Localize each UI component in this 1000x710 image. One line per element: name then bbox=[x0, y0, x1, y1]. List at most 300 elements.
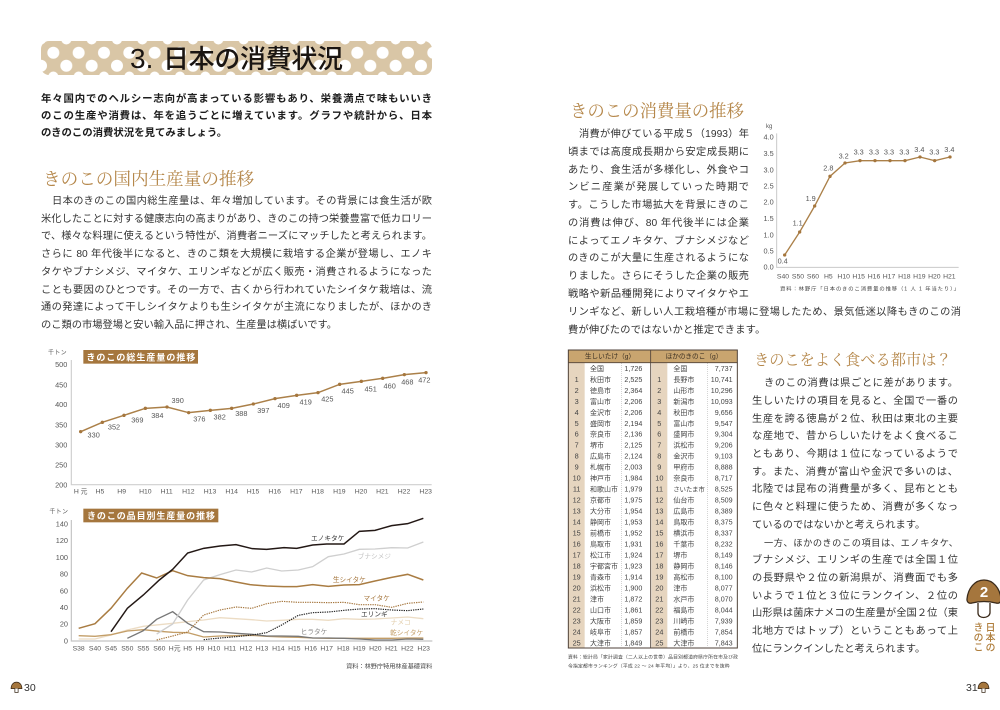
data values: 382 bbox=[214, 412, 226, 421]
table rows: 8,509 bbox=[715, 497, 733, 505]
axes bbox=[71, 520, 432, 641]
x axis labels: H元 bbox=[169, 645, 181, 653]
x axis labels: H18 bbox=[898, 273, 911, 280]
body text: consumption: のきのこが大量に生産されるようにな bbox=[568, 253, 749, 264]
body text: cities: な産地で、昔からしいたけをよく食べるこ bbox=[752, 431, 958, 442]
chart heading bbox=[83, 509, 218, 522]
y axis labels: 0 bbox=[64, 636, 68, 645]
chart heading: きのこの品目別生産量の推移 bbox=[87, 510, 215, 521]
table rows: 1,857 bbox=[624, 628, 642, 636]
table rows: 盛岡市 bbox=[673, 430, 694, 439]
data values: 419 bbox=[300, 398, 312, 407]
data values: 384 bbox=[151, 411, 163, 420]
table rows: 13 bbox=[655, 507, 663, 516]
intro text: のきのこの消費状況を見てみましょう。 bbox=[41, 128, 227, 138]
table rows: 奈良市 bbox=[590, 430, 611, 439]
x axis labels: S50 bbox=[792, 273, 804, 280]
x axis labels: S40 bbox=[89, 646, 101, 653]
table rows: 高松市 bbox=[673, 572, 694, 581]
table rows: 8,070 bbox=[715, 595, 733, 603]
data values: 2.8 bbox=[823, 163, 833, 172]
data values: 409 bbox=[278, 401, 290, 410]
intro text: のこの生産や消費は、年を追うごとに増えています。グラフや統計から、日本 bbox=[41, 110, 432, 122]
title band bbox=[41, 41, 432, 75]
table rows: 8,100 bbox=[715, 573, 733, 581]
data values: 3.3 bbox=[899, 147, 909, 156]
x axis labels: S60 bbox=[153, 646, 166, 653]
body text: consumption bbox=[568, 128, 961, 336]
x axis labels: H16 bbox=[304, 646, 317, 653]
data values: 3.3 bbox=[929, 147, 939, 156]
table rows: 2 bbox=[657, 386, 661, 395]
table rows: 2,364 bbox=[624, 387, 642, 395]
y axis labels bbox=[49, 507, 68, 645]
icon: chapter mushroom badge bbox=[966, 579, 1000, 618]
data values: 3.4 bbox=[914, 145, 924, 154]
x axis labels: H11 bbox=[224, 646, 236, 653]
x axis labels: H15 bbox=[852, 273, 865, 280]
x axis labels: H12 bbox=[182, 488, 195, 495]
body text: consumption: 消費が伸びている平成５（1993）年 bbox=[579, 128, 749, 140]
x axis labels: H5 bbox=[183, 646, 192, 653]
y axis labels: kg bbox=[766, 124, 772, 130]
x axis labels: H11 bbox=[161, 488, 173, 495]
table rows bbox=[573, 364, 733, 647]
table rows: 19 bbox=[573, 572, 581, 581]
y axis labels: 千トン bbox=[49, 507, 68, 515]
line chart: production by variety bbox=[49, 507, 432, 670]
table rows: 8,044 bbox=[715, 606, 733, 614]
x axis labels: H12 bbox=[240, 646, 252, 653]
table rows: 金沢市 bbox=[673, 452, 694, 461]
data values: 352 bbox=[108, 422, 120, 431]
table rows: 12 bbox=[655, 496, 663, 505]
body text: consumption: あたり、食生活が多様化し、外食やコ bbox=[568, 164, 749, 176]
table rows: 川崎市 bbox=[673, 616, 694, 625]
body text: consumption: ンビニ産業が発展していった時期で bbox=[568, 182, 749, 193]
table rows: 18 bbox=[655, 561, 663, 570]
table rows: 新潟市 bbox=[673, 397, 694, 406]
table rows: 1,849 bbox=[624, 639, 642, 647]
y axis labels: 100 bbox=[56, 553, 68, 562]
data values: 3.3 bbox=[884, 147, 894, 156]
body text: cities: いようで１位と３位にランクイン、２位の bbox=[752, 590, 958, 602]
ranking table bbox=[568, 350, 738, 669]
table rows: 14 bbox=[573, 518, 581, 527]
axes bbox=[777, 133, 959, 267]
table rows: 25 bbox=[573, 638, 581, 647]
table rows: 大分市 bbox=[590, 507, 611, 516]
table rows: 千葉市 bbox=[673, 539, 694, 548]
intro text: 年々国内でのヘルシー志向が高まっている影響もあり、栄養満点で味もいいき bbox=[41, 94, 432, 104]
data line bbox=[79, 371, 428, 433]
table rows: 8 bbox=[657, 452, 661, 461]
data values: 388 bbox=[235, 409, 247, 418]
y axis labels: 4.0 bbox=[763, 133, 774, 142]
table rows: 16 bbox=[573, 539, 581, 548]
body text: consumption: 戦略や新品種開発によりマイタケやエ bbox=[568, 288, 749, 300]
x axis labels: H14 bbox=[225, 488, 238, 495]
x axis labels: H17 bbox=[320, 646, 333, 653]
x axis labels: H13 bbox=[204, 488, 216, 495]
table rows: 1,726 bbox=[624, 365, 642, 373]
body text: cities: す。また、消費が富山や金沢で多いのは、 bbox=[752, 466, 958, 478]
y axis labels bbox=[763, 124, 774, 272]
table rows: 1,923 bbox=[624, 562, 642, 570]
y axis labels: 1.0 bbox=[763, 230, 774, 239]
x axis labels bbox=[777, 273, 956, 280]
y axis labels: 2.0 bbox=[763, 198, 774, 207]
table rows: さいたま市 bbox=[673, 485, 705, 494]
table rows: 宇都宮市 bbox=[590, 561, 618, 570]
body text: cities: ているのではないかと考えられます。 bbox=[752, 520, 925, 530]
x axis labels: H5 bbox=[96, 488, 105, 495]
body text: cities: ともあり、今期は１位になっているようで bbox=[752, 449, 958, 460]
series labels: ヒラタケ bbox=[301, 627, 328, 636]
table rows: 1,861 bbox=[624, 606, 642, 614]
table rows: 山口市 bbox=[590, 605, 611, 614]
body text: cities: 位にランクインしたと考えられます。 bbox=[752, 644, 925, 655]
table rows: 松江市 bbox=[590, 550, 611, 559]
chart heading bbox=[83, 350, 198, 364]
body text: consumption: リンギなど、新しい人工栽培種が市場に登場したため、景気低迷以降もきのこの消 bbox=[568, 306, 961, 318]
data values: 330 bbox=[88, 430, 100, 439]
source note: 資料：林野庁「日本のきのこ消費量の推移（1 人 1 年当たり）」 bbox=[780, 285, 959, 293]
x axis labels: H5 bbox=[824, 273, 833, 280]
table source note bbox=[568, 654, 738, 669]
series: dried shiitake bbox=[79, 630, 423, 638]
data values: 390 bbox=[172, 396, 184, 405]
data values: 1.9 bbox=[806, 194, 816, 203]
body text: cities: に色々と料理に使うため、消費が多くなっ bbox=[752, 502, 958, 512]
table rows: 9,304 bbox=[715, 431, 733, 439]
table rows: 8,375 bbox=[715, 519, 733, 527]
table rows: 1,859 bbox=[624, 617, 642, 625]
table rows: 盛岡市 bbox=[590, 419, 611, 428]
body text: domestic production: 通の発達によって干しシイタケよりも生シイタケが主流になりましたが、ほかのき bbox=[41, 302, 432, 313]
table rows: 神戸市 bbox=[590, 474, 611, 483]
data values: 468 bbox=[401, 377, 413, 386]
table rows: 1,979 bbox=[624, 486, 642, 494]
y axis labels: 80 bbox=[60, 570, 68, 579]
x axis labels: S45 bbox=[105, 646, 117, 653]
data values: 3.3 bbox=[854, 147, 864, 156]
table rows: 鳥取市 bbox=[590, 539, 611, 548]
table rows: 広島市 bbox=[590, 452, 611, 461]
series: eringi bbox=[204, 609, 423, 640]
table rows: 4 bbox=[657, 408, 661, 417]
y axis labels: 40 bbox=[60, 603, 68, 612]
x axis labels: H17 bbox=[883, 273, 895, 280]
table rows: 13 bbox=[573, 507, 581, 516]
x axis labels: H20 bbox=[928, 273, 941, 280]
table rows: 9,103 bbox=[715, 453, 733, 461]
x axis labels: H18 bbox=[311, 488, 324, 495]
y axis labels: 0.0 bbox=[763, 263, 774, 272]
table rows: 富山市 bbox=[590, 397, 611, 406]
y axis labels: 千トン bbox=[48, 349, 67, 357]
table rows: 5 bbox=[657, 419, 661, 428]
y axis labels: 450 bbox=[55, 380, 67, 389]
x axis labels: H18 bbox=[337, 646, 350, 653]
data values: 445 bbox=[342, 386, 354, 395]
table rows: 2,194 bbox=[624, 420, 642, 428]
data values: 3.3 bbox=[869, 147, 879, 156]
page number 30 bbox=[10, 682, 36, 694]
table rows: 2,125 bbox=[624, 442, 642, 450]
table rows: 3 bbox=[657, 397, 661, 406]
table rows: 23 bbox=[573, 616, 581, 625]
table rows: 16 bbox=[655, 539, 663, 548]
table rows: 津市 bbox=[590, 594, 604, 603]
body text: cities: ブナシメジ、エリンギの生産では全国１位 bbox=[752, 555, 958, 566]
x axis labels: H10 bbox=[208, 646, 220, 653]
table rows: 長野市 bbox=[673, 375, 694, 384]
table rows: 20 bbox=[573, 583, 581, 592]
table rows: 静岡市 bbox=[673, 561, 694, 570]
table rows: 2,206 bbox=[624, 409, 642, 417]
series: bunashimeji bbox=[157, 542, 423, 634]
intro text bbox=[41, 92, 432, 138]
table rows: 水戸市 bbox=[673, 594, 694, 603]
table rows: 大津市 bbox=[673, 638, 694, 647]
y axis labels: 0.5 bbox=[763, 246, 774, 255]
table rows: 京都市 bbox=[590, 496, 611, 505]
data values: 376 bbox=[193, 414, 205, 423]
table source note: 令指定都市ランキング（平成 22 ～ 24 年平均）」より、25 位までを抜粋 bbox=[568, 662, 730, 669]
icon: chapter mushroom badge: 2 bbox=[980, 584, 988, 601]
table rows: 5 bbox=[575, 419, 579, 428]
table rows: 8,525 bbox=[715, 486, 733, 494]
x axis labels: H22 bbox=[398, 488, 410, 495]
table rows: 富山市 bbox=[673, 419, 694, 428]
table rows: 10,296 bbox=[711, 387, 733, 395]
x axis labels: H16 bbox=[868, 273, 880, 280]
series labels bbox=[301, 534, 424, 637]
table rows: 2,136 bbox=[624, 431, 642, 439]
table rows: 浜松市 bbox=[590, 583, 611, 592]
table rows: 1,872 bbox=[624, 595, 642, 603]
body text: domestic production: 日本のきのこの国内総生産量は、年々増加しています。その背景には食生活が欧 bbox=[52, 196, 432, 207]
table rows: 21 bbox=[655, 594, 663, 603]
table rows: 和歌山市 bbox=[590, 485, 618, 494]
table rows: 7,737 bbox=[715, 365, 733, 373]
table rows: 15 bbox=[655, 529, 663, 538]
body text: consumption: す。こうした市場拡大を背景にきのこ bbox=[568, 200, 749, 210]
series labels: マイタケ bbox=[363, 594, 390, 603]
y axis labels: 20 bbox=[60, 620, 68, 629]
series labels: エノキタケ bbox=[311, 534, 345, 543]
data values: 369 bbox=[131, 416, 143, 425]
body text: cities: 北地方ではトップ）ということもあって上 bbox=[752, 626, 958, 636]
table rows: 6 bbox=[657, 430, 661, 439]
y axis labels: 3.5 bbox=[763, 149, 774, 158]
table rows: 24 bbox=[655, 627, 663, 636]
line chart: total production bbox=[48, 349, 432, 495]
table rows: 2,206 bbox=[624, 398, 642, 406]
x axis labels: H14 bbox=[272, 646, 285, 653]
x axis labels: H20 bbox=[369, 646, 382, 653]
y axis labels: 350 bbox=[55, 420, 67, 429]
table rows: 23 bbox=[655, 616, 663, 625]
x axis labels: H19 bbox=[333, 488, 346, 495]
table rows: 21 bbox=[573, 594, 581, 603]
x axis labels: H20 bbox=[355, 488, 367, 495]
table rows: 山形市 bbox=[673, 386, 694, 395]
body text: cities: 一方、ほかのきのこの項目は、エノキタケ、 bbox=[764, 538, 958, 548]
table rows: 堺市 bbox=[590, 441, 604, 450]
heading: consumption: きのこの消費量の推移 bbox=[570, 97, 744, 122]
body text: consumption: 費が伸びたのではないかと推定できます。 bbox=[568, 324, 766, 336]
table rows: 18 bbox=[573, 561, 581, 570]
body text: consumption: 頃までは高度成長期から安定成長期に bbox=[568, 146, 749, 158]
table rows: 19 bbox=[655, 572, 663, 581]
data values: 425 bbox=[321, 394, 333, 403]
x axis labels: H19 bbox=[353, 646, 366, 653]
table rows: 12 bbox=[573, 496, 581, 505]
data values: 460 bbox=[384, 381, 396, 390]
body text: cities bbox=[752, 377, 958, 655]
data values: 0.4 bbox=[778, 257, 788, 266]
table rows: 2,003 bbox=[624, 464, 642, 472]
x axis labels: H9 bbox=[117, 488, 126, 495]
data values: 1.1 bbox=[793, 218, 803, 227]
table rows: 2,124 bbox=[624, 453, 642, 461]
table rows: 1 bbox=[575, 375, 579, 384]
table rows: 1,952 bbox=[624, 530, 642, 538]
table rows: 1,924 bbox=[624, 551, 642, 559]
table rows: 7 bbox=[575, 441, 579, 450]
data values bbox=[778, 145, 954, 266]
table rows: 3 bbox=[575, 397, 579, 406]
table rows: 7,843 bbox=[715, 639, 733, 647]
data values: 451 bbox=[365, 384, 377, 393]
chapter label: 日本の bbox=[983, 622, 994, 652]
table rows: 14 bbox=[655, 518, 663, 527]
body text: cities: 北陸では昆布の消費量が多く、昆布ととも bbox=[752, 484, 958, 495]
y axis labels: 300 bbox=[55, 440, 67, 449]
x axis labels: H21 bbox=[385, 646, 398, 653]
body text: domestic production bbox=[41, 195, 432, 331]
heading: domestic production: きのこの国内生産量の推移 bbox=[43, 166, 254, 191]
table rows: 9 bbox=[575, 463, 579, 472]
series: fresh shiitake bbox=[79, 571, 423, 628]
table rows: 6 bbox=[575, 430, 579, 439]
body text: cities: きのこの消費は県ごとに差があります。 bbox=[764, 378, 958, 389]
table rows: 10 bbox=[573, 474, 581, 483]
y axis labels: 400 bbox=[55, 400, 67, 409]
table rows: 秋田市 bbox=[590, 375, 611, 384]
series labels: 生シイタケ bbox=[333, 575, 366, 584]
table rows: 8,146 bbox=[715, 562, 733, 570]
y axis labels: 60 bbox=[60, 586, 68, 595]
table rows: 鳥取市 bbox=[673, 518, 694, 527]
table rows: 奈良市 bbox=[673, 474, 694, 483]
table rows: 22 bbox=[573, 605, 581, 614]
table rows: 全国 bbox=[673, 364, 687, 373]
table rows: 全国 bbox=[590, 364, 604, 373]
table rows: 9 bbox=[657, 463, 661, 472]
x axis labels: S38 bbox=[73, 646, 85, 653]
table rows: 7 bbox=[657, 441, 661, 450]
body text: domestic production: 米化したことに対する健康志向の高まりがあり、きのこの持つ栄養豊富で低カロリー bbox=[41, 214, 432, 225]
table rows: 秋田市 bbox=[673, 408, 694, 417]
body text: cities: 山形県は菌床ナメコの生産量が全国２位（東 bbox=[752, 608, 958, 619]
table rows: 8 bbox=[575, 452, 579, 461]
table rows: 8,717 bbox=[715, 475, 733, 483]
y axis labels: 140 bbox=[56, 519, 68, 528]
table rows: 2 bbox=[575, 386, 579, 395]
table rows: 徳島市 bbox=[590, 386, 611, 395]
series: enokitake bbox=[111, 518, 423, 632]
table rows: 24 bbox=[573, 627, 581, 636]
table rows: 1,954 bbox=[624, 508, 642, 516]
table rows: 8,232 bbox=[715, 540, 733, 548]
table header: 生しいたけ（g） bbox=[585, 352, 635, 361]
table rows: 22 bbox=[655, 605, 663, 614]
table rows: 17 bbox=[573, 550, 581, 559]
table rows: 17 bbox=[655, 550, 663, 559]
table rows: 金沢市 bbox=[590, 408, 611, 417]
data line bbox=[783, 155, 952, 257]
table rows: 福島市 bbox=[673, 605, 694, 614]
series labels: エリンギ bbox=[361, 610, 388, 618]
x axis labels: H15 bbox=[288, 646, 301, 653]
x axis labels bbox=[73, 645, 430, 653]
x axis labels: H21 bbox=[376, 488, 389, 495]
table rows: 25 bbox=[655, 638, 663, 647]
x axis labels: H16 bbox=[268, 488, 281, 495]
series: nameko bbox=[79, 617, 423, 639]
y axis labels: 250 bbox=[55, 460, 67, 469]
table header bbox=[585, 352, 722, 361]
table rows: 1,975 bbox=[624, 497, 642, 505]
body text: domestic production: ことも要因のひとつです。その一方で、古くから行われていたシイタケ栽培は、流 bbox=[41, 284, 432, 296]
table rows: 10,093 bbox=[711, 398, 733, 406]
x axis labels: S55 bbox=[137, 646, 150, 653]
series: hiratake bbox=[127, 612, 423, 640]
table rows: 横浜市 bbox=[673, 529, 694, 538]
x axis labels: H23 bbox=[419, 488, 432, 495]
x axis labels: H17 bbox=[290, 488, 303, 495]
body text: domestic production: タケやブナシメジ、マイタケ、エリンギなどが広く販売・消費されるようになった bbox=[41, 267, 432, 278]
body text: domestic production: さらに 80 年代後半になると、きのこ類を大規模に栽培する企業が登場し、エノキ bbox=[41, 249, 432, 260]
table rows: 広島市 bbox=[673, 507, 694, 516]
y axis labels: 500 bbox=[55, 360, 67, 369]
source note: 資料：林野庁特用林産基礎資料 bbox=[346, 662, 432, 670]
table rows: 8,149 bbox=[715, 551, 733, 559]
table header: ほかのきのこ（g） bbox=[666, 353, 722, 361]
x axis labels: H10 bbox=[139, 488, 152, 495]
table rows: 8,389 bbox=[715, 508, 733, 516]
table rows: 10,741 bbox=[711, 376, 733, 384]
table rows: 9,206 bbox=[715, 442, 733, 450]
line chart: consumption per person bbox=[763, 124, 959, 293]
axes bbox=[71, 360, 432, 485]
body text: consumption: の消費は伸び、80 年代後半には企業 bbox=[568, 218, 749, 228]
chapter label: きのこ bbox=[971, 622, 982, 652]
table rows: 1,984 bbox=[624, 475, 642, 483]
body text: cities: の長野県や２位の新潟県が、消費面でも多 bbox=[752, 573, 958, 584]
x axis labels: H21 bbox=[943, 273, 956, 280]
series: maitake bbox=[157, 601, 423, 640]
table rows: 11 bbox=[656, 485, 663, 494]
y axis labels: 1.5 bbox=[763, 214, 774, 223]
table rows: 甲府市 bbox=[673, 463, 694, 472]
table rows: 4 bbox=[575, 408, 579, 417]
table rows: 前橋市 bbox=[590, 529, 611, 538]
table rows: 仙台市 bbox=[673, 496, 694, 505]
